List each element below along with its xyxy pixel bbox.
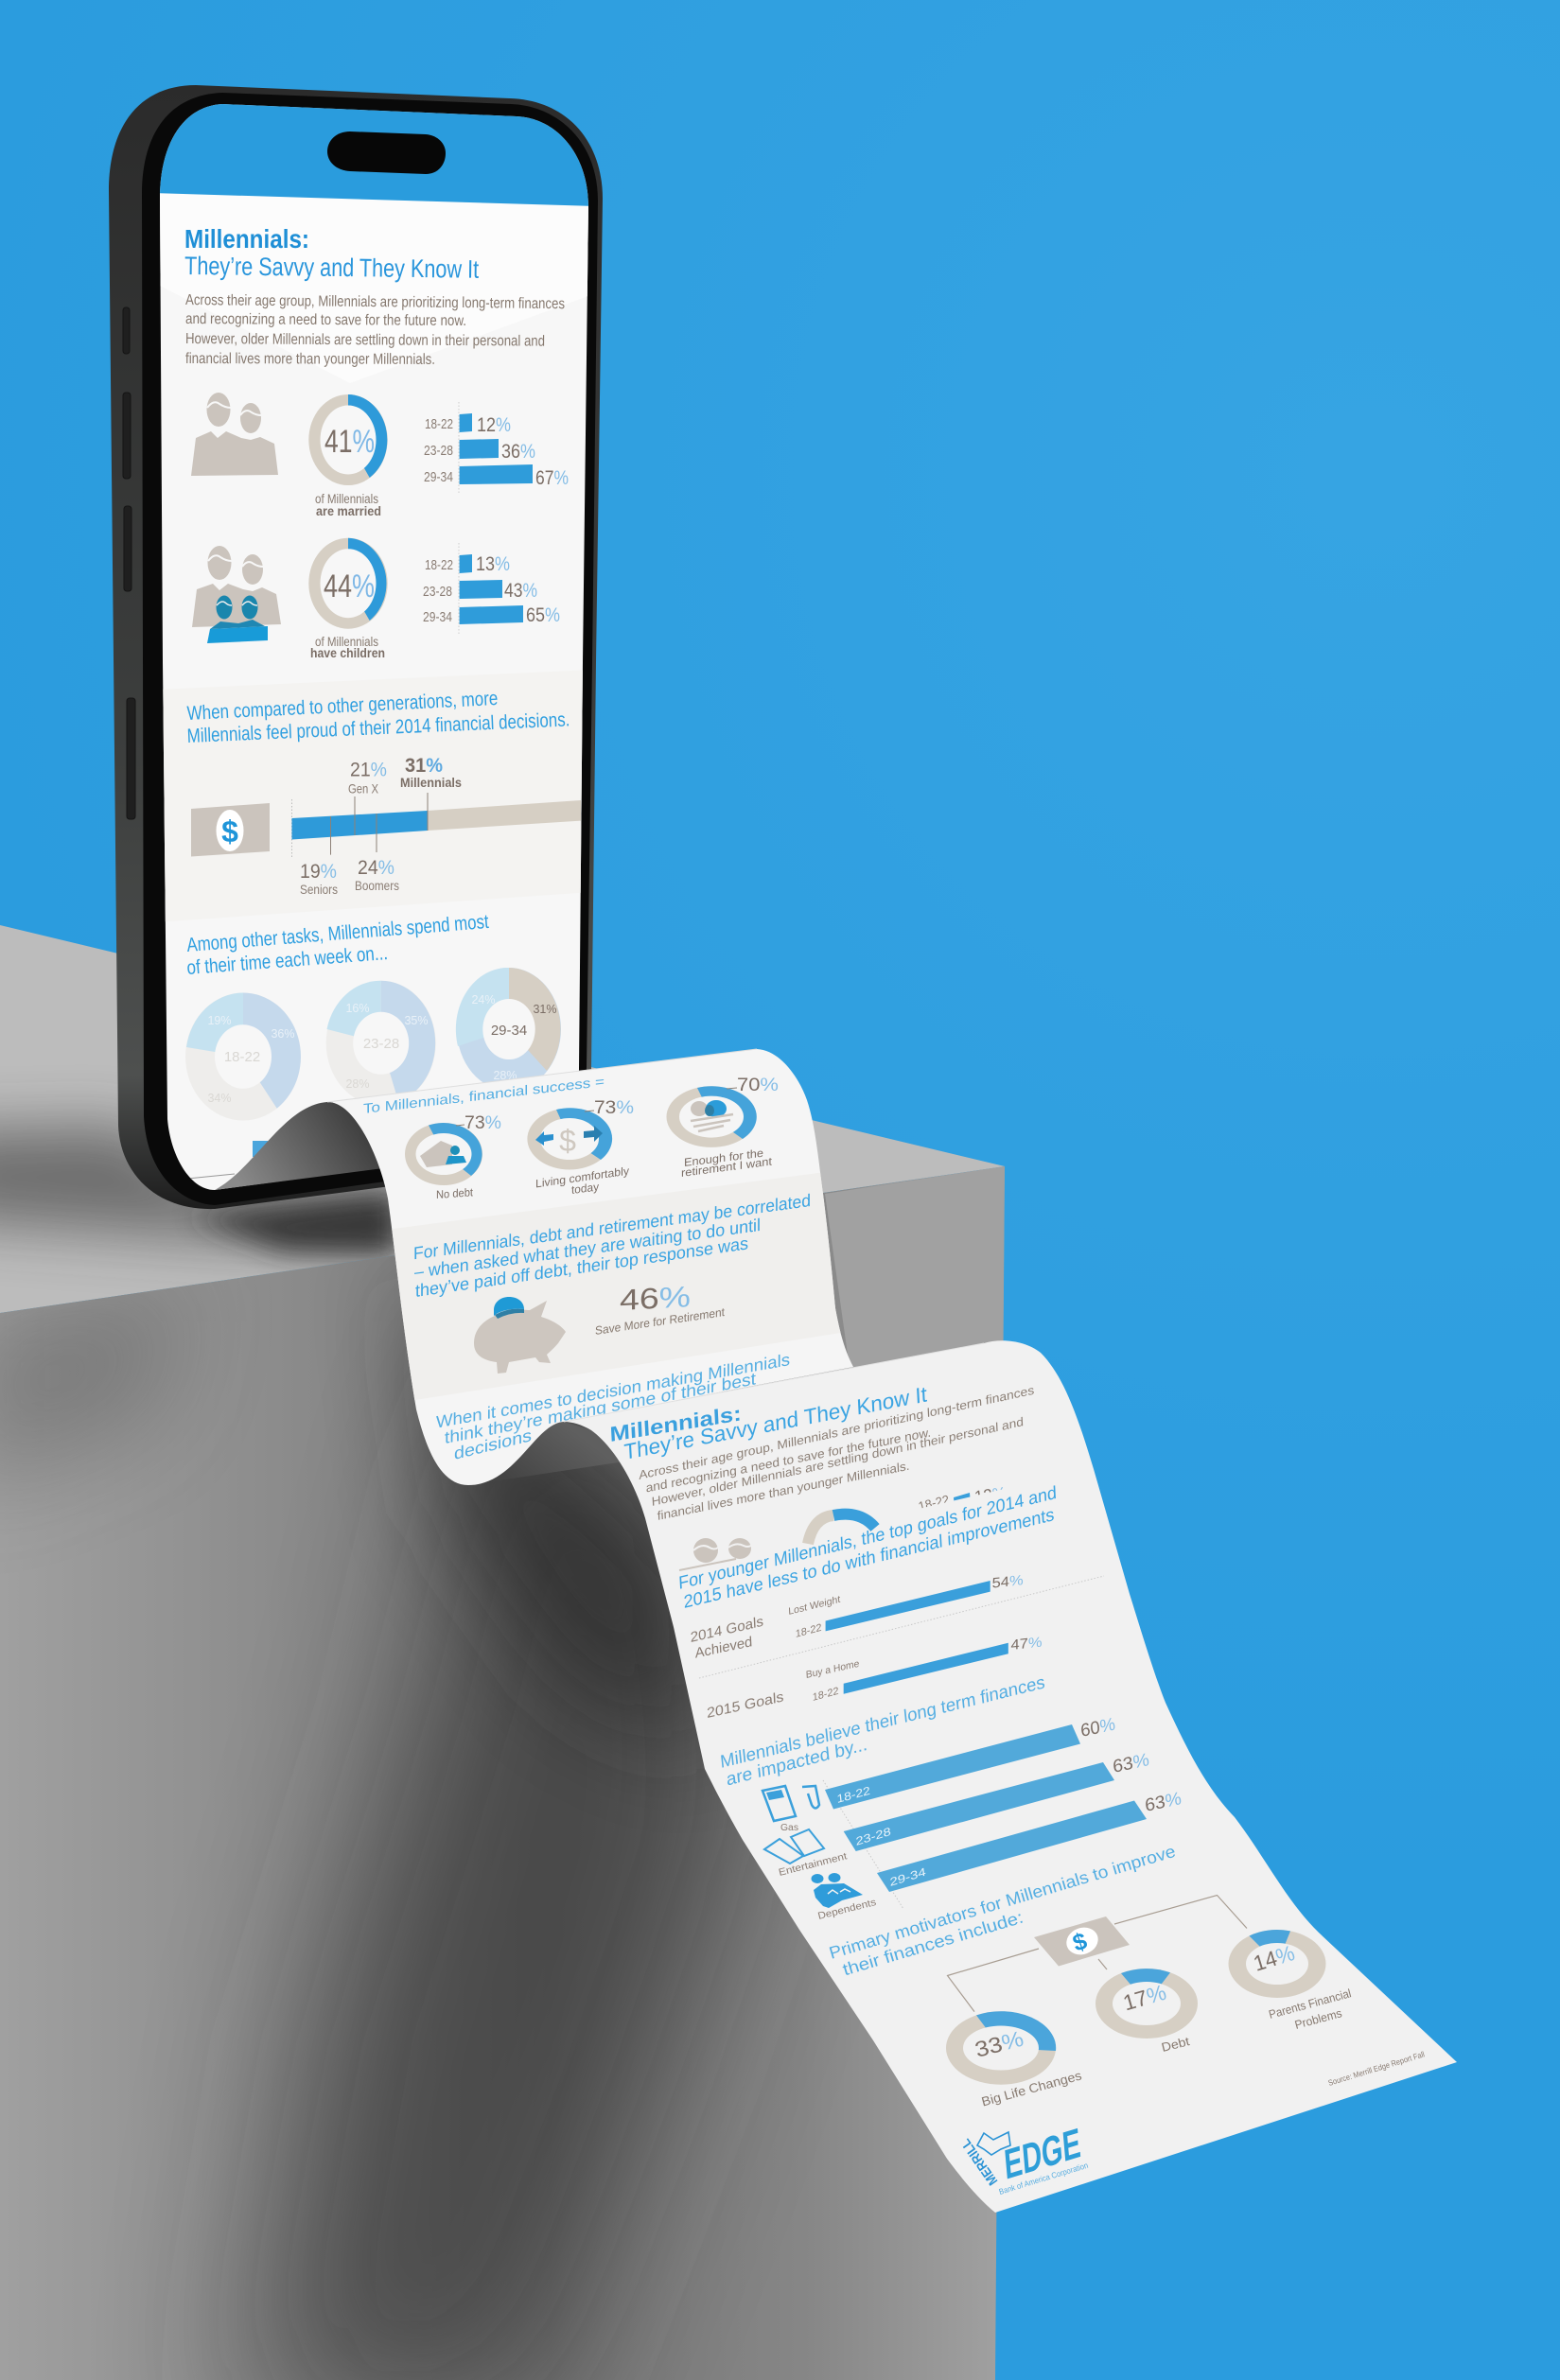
donut: 29-34: 24% [471,993,496,1006]
donut: 18-22 [185,993,301,1120]
chart: 2015 goals: Buy a Home [806,1658,860,1681]
section band: generations [156,670,591,922]
bar chart: impact by age [823,1714,1183,1909]
bar chart: married by age: 12% [477,414,511,436]
icon: dollar bill [191,803,270,857]
donut: 18-22: 18-22 [224,1049,260,1065]
caption: have children [310,635,385,660]
donut: big life changes 33%: Big Life Changes [980,2068,1083,2109]
diagram: money with connectors [948,1896,1247,2012]
title repeated on paper: They’re Savvy and They Know It [623,1381,928,1464]
intro paragraph: However, older Millennials are settling down in their personal and [185,331,545,350]
donut: 41% married [308,394,388,485]
heading: primary motivators: Primary motivators for Millennials to improve [827,1842,1178,1963]
bar chart: married by age: 36% [501,441,535,463]
title [184,224,480,284]
donut: living comfortably 73% [527,1098,634,1197]
donut: parents financial problems 14% [1228,1930,1353,2032]
heading: debt and retirement: For Millennials, debt and retirement may be correlated [413,1190,811,1263]
heading: primary motivators: their finances include: [840,1908,1025,1979]
donut: parents financial problems 14%: 14% [1251,1940,1298,1976]
section band: retirement [378,1171,847,1403]
heading: decision making [436,1350,790,1463]
bar chart: impact by age: 18-22 [836,1784,871,1806]
icon: dependents [812,1873,877,1922]
stat: Millennials: 31% [405,755,443,777]
paper ribbon upper section [327,1049,853,1485]
bar chart: married by age: 67% [535,467,569,489]
icon: nest with eggs [691,1100,733,1131]
icon: married couple [191,393,278,476]
heading: financial success: To Millennials, financial success = [363,1075,605,1117]
heading: younger millennials goals: For younger Millennials, the top goals for 2014 and [678,1483,1057,1594]
intro paragraph repeated on paper: financial lives more than younger Millennials. [657,1459,910,1523]
paper ribbon lower section [564,1340,1457,2213]
donut: parents financial problems 14%: Parents Financial [1268,1986,1353,2021]
stat: 46% save more [595,1280,725,1338]
donut: 18-22: 19% [207,1014,232,1027]
donut: 23-28: 16% [345,1002,370,1015]
donut: parents financial problems 14%: Problems [1293,2006,1343,2032]
heading: younger millennials goals: 2015 have less to do with financial improvements [683,1505,1055,1613]
caption: have children: of Millennials [315,635,378,649]
bar chart: impact by age: 29-34 [889,1864,927,1889]
icon: dollar with arrows: $ [559,1124,576,1158]
heading: tasks: of their time each week on... [186,942,389,979]
donut: 29-34 [456,968,561,1091]
screen top blue band [160,104,588,206]
heading: long term finances: Millennials believe their long term finances [719,1672,1046,1773]
icon: entertainment tickets [764,1829,849,1879]
heading: debt and retirement: – when asked what they are waiting to do until [414,1215,761,1282]
heading: decision making: When it comes to decision making Millennials [436,1350,790,1432]
generations bar [291,793,581,859]
chart: 2015 goals: 18-22 [813,1686,839,1704]
icon: dependents: Dependents [816,1897,877,1922]
title: They’re Savvy and They Know It [184,252,480,284]
diagram: money with connectors: $ [1070,1928,1091,1957]
donut: living comfortably 73%: today [571,1180,599,1197]
bar chart: married by age [424,402,569,495]
donut: debt 17%: Debt [1160,2034,1191,2055]
chart: 2015 goals: 47% [1010,1635,1043,1654]
bar chart: impact by age: 63% [1144,1789,1183,1816]
intro paragraph: Across their age group, Millennials are prioritizing long-term finances [185,292,565,312]
chart: 2014 goals: 18-22 [796,1622,822,1640]
bar chart: children by age: 23-28 [423,584,452,600]
icon: piggy bank [474,1297,566,1374]
donut: 23-28: 28% [345,1077,370,1091]
intro paragraph: financial lives more than younger Millennials. [185,351,435,368]
logo: Merrill Edge: EDGE [1003,2120,1082,2189]
icon: parents with children [192,546,281,643]
stat: 46% save more: 46% [620,1280,691,1317]
chart: 2014 goals [690,1572,1024,1662]
partly hidden donut and bar: 18-22 [917,1492,951,1514]
donut: debt 17%: 17% [1120,1980,1169,2015]
donut: 23-28: 35% [404,1014,429,1027]
heading: generations [186,688,570,747]
heading: long term finances: are impacted by... [726,1735,868,1791]
bottom square [253,1141,268,1157]
logo: Merrill Edge [957,2120,1090,2196]
donut: retirement 70%: 70% [737,1076,779,1095]
caption: have children: have children [310,646,385,660]
donut: retirement 70%: retirement I want [681,1154,773,1180]
bar chart: children by age: 43% [504,580,537,602]
donut: living comfortably 73%: Living comfortably [535,1164,629,1190]
donut: no debt 73%: 73% [464,1113,501,1133]
donut: 18-22: 34% [207,1092,232,1105]
grey block [0,925,1005,2380]
bar chart: children by age: 29-34 [423,609,452,625]
donut: no debt 73%: No debt [436,1185,474,1201]
icon: dollar bill: $ [221,814,238,849]
icon: house and person [420,1141,466,1167]
paper underside hump [468,1422,624,1485]
bar chart: impact by age: 63% [1112,1750,1150,1777]
chart: 2014 goals: 2014 Goals [690,1614,763,1646]
heading: decision making: decisions [454,1425,532,1463]
stat: Gen X [348,759,387,796]
logo: Merrill Edge: Bank of America Corporation [998,2161,1090,2196]
bar chart: children by age: 65% [526,604,560,626]
stat: Gen X: Gen X [348,781,379,796]
stat: Seniors: 19% [300,861,337,883]
people heads partly hidden [679,1538,751,1570]
caption: are married: are married [316,504,381,518]
heading: debt and retirement: they’ve paid off debt, their top response was [415,1233,748,1301]
caption: are married [315,492,381,518]
caption: are married: of Millennials [315,492,378,506]
heading: generations: When compared to other generations, more [186,688,499,725]
logo: Merrill Edge: MERRILL [957,2136,1000,2188]
chart: 2014 goals: 54% [992,1572,1024,1592]
partly hidden donut and bar: 12% [973,1483,1008,1506]
stat: Millennials: Millennials [400,775,462,790]
intro paragraph repeated on paper: Across their age group, Millennials are prioritizing long-term finances [639,1383,1035,1482]
stat: Boomers [355,857,399,893]
donut: retirement 70%: Enough for the [684,1146,763,1169]
bar chart: children by age: 13% [476,553,510,575]
donut: debt 17% [1096,1969,1198,2055]
bar chart: children by age: 18-22 [425,557,453,573]
donut: retirement 70% [666,1076,779,1180]
source note: Source: Merrill Edge Report Fall [1327,2049,1426,2088]
stat: Boomers: 24% [358,857,394,879]
title repeated on paper: Millennials: [609,1401,742,1446]
donut: 29-34: 28% [493,1069,517,1082]
bar chart: children by age [423,543,560,634]
bar chart: impact by age: 60% [1079,1714,1116,1741]
intro paragraph repeated on paper: and recognizing a need to save for the future now. [645,1425,931,1495]
icon: entertainment tickets: Entertainment [778,1850,849,1879]
heading: generations: Millennials feel proud of their 2014 financial decisions. [186,709,570,747]
bar chart: married by age: 29-34 [424,469,453,485]
donut: 44% children: 44% [324,569,375,604]
chart: 2015 goals: 2015 Goals [707,1689,784,1722]
chart: 2014 goals: Lost Weight [788,1594,841,1618]
title: Millennials: [184,224,309,254]
intro paragraph [185,292,565,368]
heading: tasks: Among other tasks, Millennials spend most [186,911,490,956]
stat: Gen X: 21% [350,759,387,781]
donut: 23-28 [326,981,436,1106]
paper underside in phone [215,1102,383,1190]
heading: tasks [186,911,490,979]
bar chart: impact by age: 23-28 [855,1825,892,1848]
donut: 18-22: 36% [271,1027,295,1041]
stat: Millennials [400,755,462,790]
donut: 44% children [308,538,388,629]
intro paragraph repeated on paper: However, older Millennials are settling down in their personal and [651,1414,1024,1509]
heading: decision making: think they’re making some of their best [445,1369,756,1447]
donut: 29-34: 29-34 [491,1023,527,1039]
phone screen [151,95,596,1201]
chart: 2015 goals [707,1635,1043,1722]
phone body [109,85,603,1209]
chart: 2014 goals: Achieved [694,1634,753,1662]
donut: 23-28: 23-28 [363,1036,399,1052]
donut: 29-34: 31% [533,1003,557,1016]
donut: big life changes 33%: 33% [973,2026,1026,2062]
partly hidden donut and bar [808,1474,1069,1544]
donut: big life changes 33% [946,2011,1083,2109]
bar chart: married by age: 23-28 [424,443,453,459]
heading: debt and retirement [413,1190,811,1301]
donut: living comfortably 73%: 73% [594,1098,634,1118]
intro paragraph repeated on paper [639,1383,1035,1523]
dynamic island [327,131,446,174]
stat: Seniors [300,861,338,897]
intro paragraph: and recognizing a need to save for the future now. [185,311,466,329]
icon: gas pump [762,1786,819,1833]
phone side buttons [123,307,135,819]
icon: gas pump: Gas [780,1823,798,1833]
stat: Boomers: Boomers [355,878,399,893]
donut: 41% married: 41% [324,424,375,460]
bar chart: married by age: 18-22 [425,416,453,432]
donut: no debt 73% [405,1113,501,1201]
stat: 46% save more: Save More for Retirement [595,1305,725,1338]
stat: Seniors: Seniors [300,882,338,897]
